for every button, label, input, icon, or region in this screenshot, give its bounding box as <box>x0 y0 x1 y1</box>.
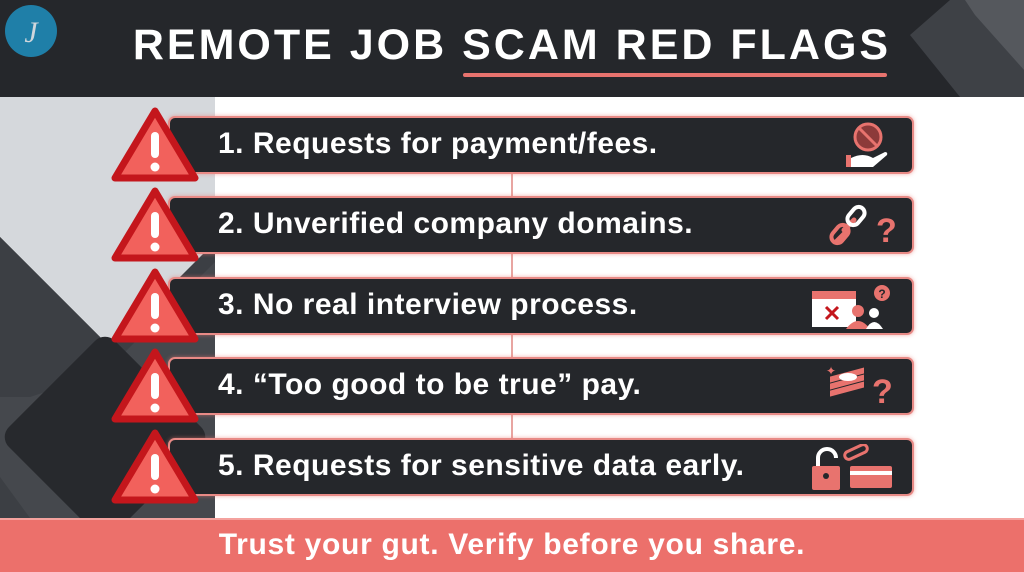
header <box>0 0 1024 97</box>
text: 1. Requests for payment/fees. <box>218 127 658 160</box>
row 2 <box>112 188 916 262</box>
text: 5. Requests for sensitive data early. <box>218 449 744 482</box>
row 3 <box>112 268 916 342</box>
title underline <box>463 73 887 77</box>
icon: calendar x people: ? <box>878 287 886 301</box>
row 4 <box>112 348 916 422</box>
row 5 <box>112 430 916 504</box>
footer text: Trust your gut. Verify before you share. <box>219 528 805 561</box>
footer <box>0 518 1024 572</box>
icon: hand with no money <box>846 122 888 167</box>
icon: broken link question <box>829 204 896 248</box>
row 1 <box>112 108 916 182</box>
text: 2. Unverified company domains. <box>218 207 693 240</box>
logo <box>5 5 57 57</box>
icon: money stack question: ✦ <box>826 364 836 378</box>
icon: warning triangle <box>112 108 198 182</box>
icon: calendar x people <box>812 285 890 329</box>
icon: money stack question <box>826 364 893 409</box>
icon: lock and card <box>812 444 892 490</box>
logo: J <box>24 16 39 49</box>
left background panel <box>0 97 215 518</box>
connector line <box>511 170 513 440</box>
title: REMOTE JOB SCAM RED FLAGS <box>133 21 891 69</box>
text: 4. “Too good to be true” pay. <box>218 368 641 401</box>
text: 3. No real interview process. <box>218 288 638 321</box>
